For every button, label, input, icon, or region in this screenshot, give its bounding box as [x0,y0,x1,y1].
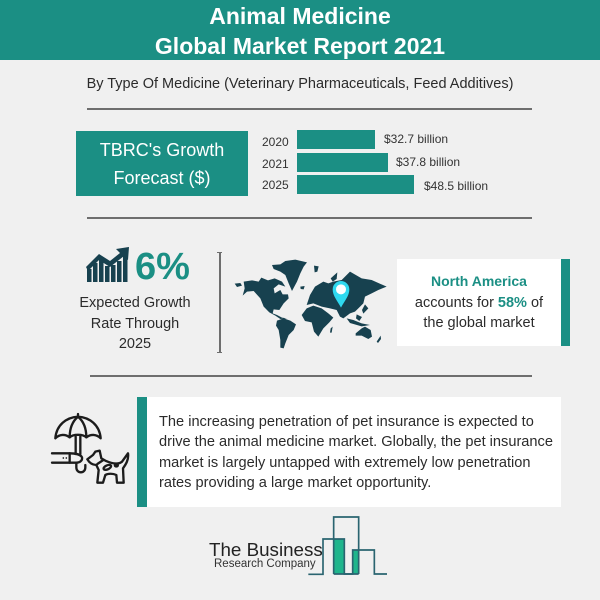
logo: The Business Research Company: Research Company [214,558,316,570]
text panel: pet insurance driver: rates providing a large market opportunity. [159,475,431,491]
callout: North America: accounts for 58% of [415,294,543,310]
icon: location pin [333,281,349,308]
growth rate caption: Expected Growth [79,295,191,311]
growth rate caption: 2025 [119,336,151,352]
logo: The Business Research Company [209,516,387,576]
forecast label box: TBRC's Growth [100,140,224,160]
text panel: pet insurance driver: The increasing penetration of pet insurance is expected to [159,414,534,430]
icon: growth chart [86,247,129,282]
bar chart: market size: $32.7 billion [384,132,448,146]
title banner [0,0,600,60]
callout: North America [397,259,570,346]
title banner: Global Market Report 2021 [155,33,445,59]
subtitle: By Type Of Medicine (Veterinary Pharmaceuticals, Feed Additives) [87,76,513,92]
bar chart: market size: $48.5 billion [424,179,488,193]
logo: The Business Research Company: The Business [209,539,323,560]
callout: North America: North America [431,273,527,289]
bar chart: market size: 2021 [262,157,289,171]
callout: North America: the global market [423,315,535,331]
forecast label box [76,131,248,196]
world map with pin [234,260,386,348]
growth rate caption [79,295,191,352]
text panel: pet insurance driver [137,397,561,507]
title banner: Animal Medicine [209,3,391,29]
forecast label box: Forecast ($) [113,168,211,188]
bar chart: market size: 2020 [262,135,289,149]
icon: umbrella, hand and dog [50,412,130,484]
growth rate caption: Rate Through [91,316,179,332]
bar chart: market size [262,130,488,194]
text panel: pet insurance driver: market is largely untapped with extremely low penetration [159,455,531,471]
bar chart: market size: 2025 [262,178,289,192]
vertical divider [217,252,222,353]
stat: 6%: 6% [135,246,190,288]
bar chart: market size: $37.8 billion [396,155,460,169]
text panel: pet insurance driver: drive the animal medicine market. Globally, the pet insurance [159,434,553,450]
